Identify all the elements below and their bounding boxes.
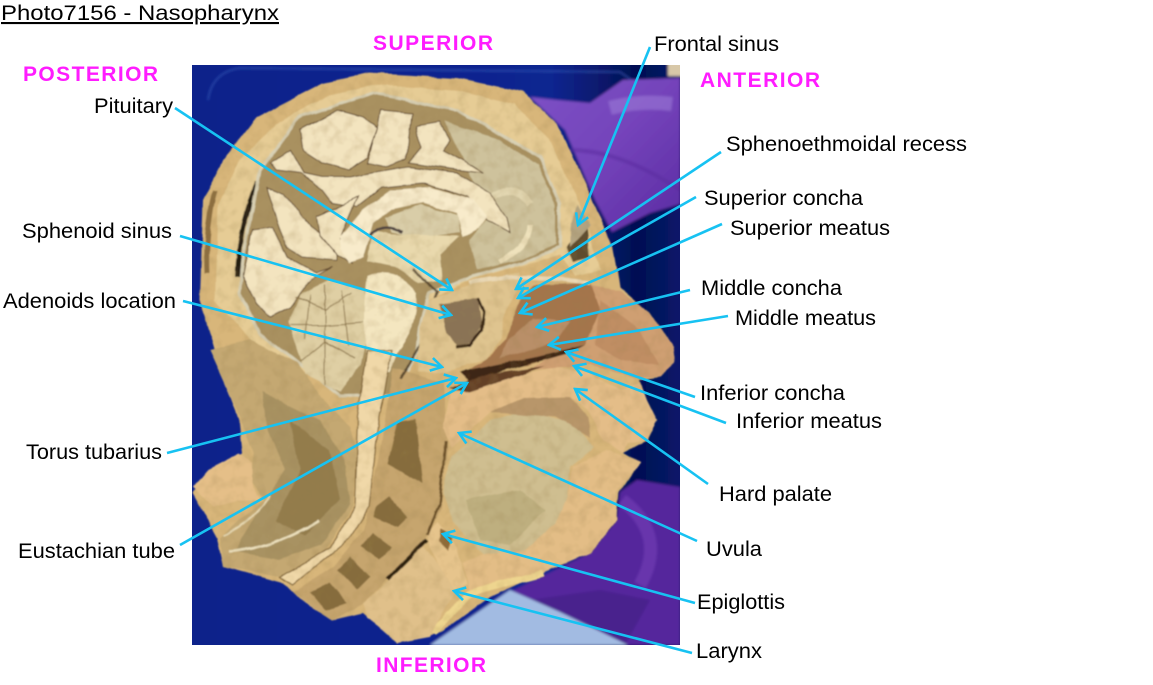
- text: Uvula: Uvula: [706, 538, 762, 561]
- palate: [443, 367, 657, 453]
- text: Pituitary: Pituitary: [94, 95, 174, 118]
- yellow chin edge: [433, 573, 543, 633]
- tissue grain: [192, 65, 680, 645]
- arrow: Uvula: [459, 433, 697, 541]
- fornix and septum: [385, 205, 460, 238]
- text: Hard palate: Hard palate: [719, 483, 832, 506]
- arrow: Superior concha: [518, 197, 696, 298]
- spine column: [293, 367, 447, 620]
- arrow: Torus tubarius: [167, 378, 456, 453]
- scalp inner pale band: [215, 85, 600, 380]
- arrow: Middle meatus: [549, 316, 728, 345]
- specimen photograph: [192, 65, 680, 645]
- arrow: Pituitary: [175, 108, 452, 290]
- text: Superior concha: Superior concha: [704, 187, 863, 210]
- pharynx dark gap: [387, 540, 427, 580]
- arrow: Superior meatus: [520, 224, 722, 313]
- label: POSTERIOR: POSTERIOR: [23, 63, 158, 86]
- floor of mouth: [463, 450, 640, 590]
- arrow: Frontal sinus: [578, 47, 650, 225]
- arrow: Sphenoid sinus: [180, 236, 451, 315]
- arrow: Middle concha: [537, 290, 690, 327]
- ear flap tissue: [193, 453, 260, 507]
- scalp dark stripes: [207, 190, 215, 273]
- label: SUPERIOR: SUPERIOR: [373, 32, 493, 55]
- tongue: [443, 410, 595, 553]
- larynx: [363, 547, 457, 643]
- pale blue mat: [430, 590, 628, 645]
- text: Adenoids location: Adenoids location: [3, 290, 176, 313]
- spinal cord: [280, 350, 392, 585]
- text: Torus tubarius: Torus tubarius: [26, 441, 162, 464]
- text: Inferior concha: Inferior concha: [700, 382, 845, 405]
- skull base strip: [470, 278, 590, 283]
- purple glove top: [530, 78, 680, 232]
- arrow: Larynx: [454, 591, 692, 653]
- arrow: Eustachian tube: [180, 383, 467, 545]
- nasal cavity: [470, 283, 600, 370]
- vertebrae: [310, 420, 423, 610]
- arrow: Inferior meatus: [574, 366, 726, 423]
- gyri: [243, 110, 510, 317]
- arrow: Adenoids location: [183, 301, 442, 367]
- nose: [530, 285, 675, 378]
- text: Superior meatus: Superior meatus: [730, 217, 890, 240]
- text: Eustachian tube: Eustachian tube: [18, 540, 175, 563]
- text: Middle concha: Middle concha: [701, 277, 842, 300]
- head outline: [193, 73, 675, 643]
- frontal lobe pale region: [445, 122, 556, 270]
- blue tray background: [192, 65, 680, 645]
- cerebellum: [288, 280, 368, 392]
- brainstem: [364, 273, 417, 372]
- arrow: Sphenoethmoidal recess: [516, 152, 721, 289]
- text: Middle meatus: Middle meatus: [735, 307, 876, 330]
- label: INFERIOR: INFERIOR: [376, 654, 486, 677]
- label: ANTERIOR: ANTERIOR: [700, 69, 820, 92]
- sphenoid bone: [418, 272, 520, 372]
- text: Larynx: Larynx: [696, 640, 763, 663]
- title: Photo7156 - Nasopharynx: [1, 2, 280, 25]
- purple glove bottom: [510, 480, 680, 645]
- thalamus: [367, 230, 460, 283]
- text: Epiglottis: Epiglottis: [697, 591, 785, 614]
- brain cavity: [240, 93, 560, 396]
- arrow: Epiglottis: [443, 534, 695, 603]
- text: Frontal sinus: Frontal sinus: [654, 33, 779, 56]
- posterior neck tissue: [210, 340, 357, 577]
- text: Sphenoethmoidal recess: Sphenoethmoidal recess: [726, 133, 967, 156]
- epiglottis: [427, 522, 467, 590]
- text: Sphenoid sinus: Sphenoid sinus: [22, 220, 172, 243]
- arrow: Inferior concha: [566, 352, 695, 397]
- sphenoid sinus: [440, 298, 482, 347]
- corpus callosum: [340, 187, 487, 263]
- frontal sinus: [566, 228, 590, 263]
- arrow: Hard palate: [575, 389, 708, 484]
- text: Inferior meatus: Inferior meatus: [736, 410, 882, 433]
